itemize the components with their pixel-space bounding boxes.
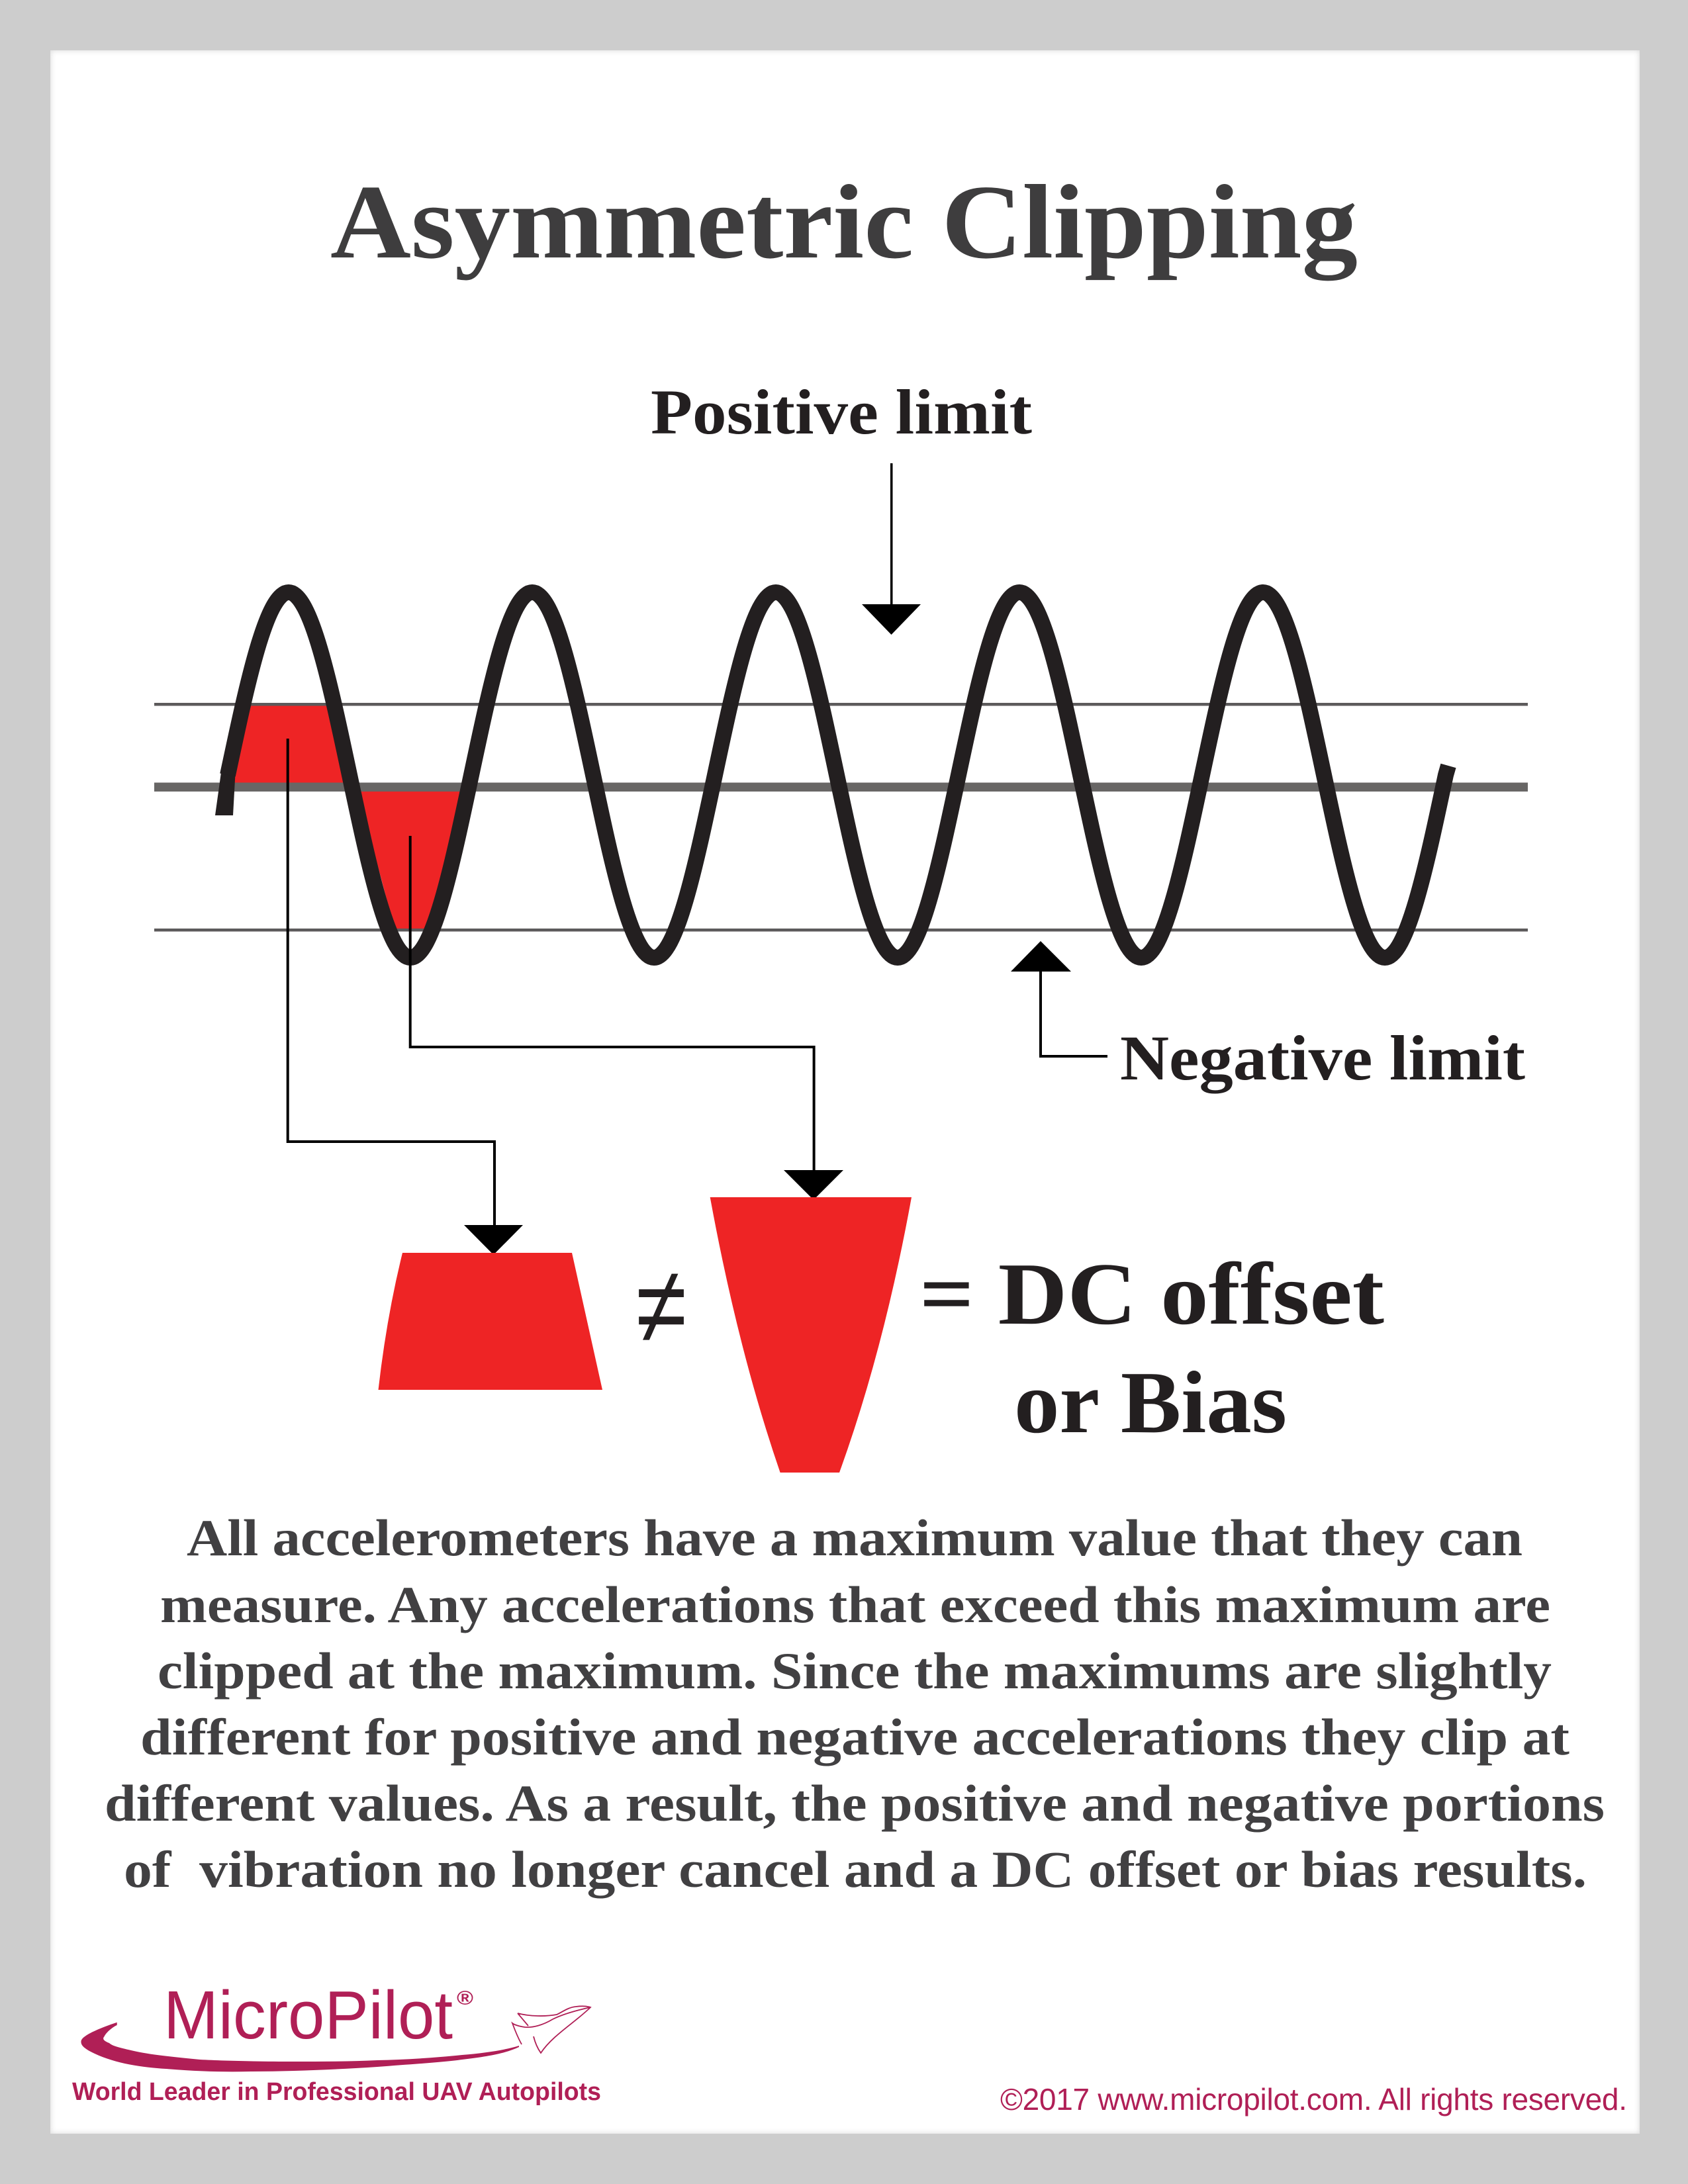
highlighted negative area: [357, 792, 467, 929]
registered mark: ®: [457, 1987, 473, 2009]
logo: MicroPilot: [72, 1977, 601, 2106]
negative limit line: [154, 929, 1528, 932]
highlighted positive area: [232, 703, 348, 783]
negative clipped shape: [710, 1197, 912, 1473]
positive clipped shape: [379, 1253, 602, 1390]
logo wordmark: MicroPilot: [164, 1977, 453, 2053]
label: negative limit: Negative limit: [1120, 1023, 1525, 1093]
equation result: = DC offset: [919, 1245, 1384, 1343]
logo tagline: World Leader in Professional UAV Autopilots: [72, 2078, 601, 2106]
equation result: or Bias: [1014, 1353, 1287, 1451]
logo swoosh: [81, 2023, 519, 2071]
positive limit line: [154, 703, 1528, 705]
explanation text: different for positive and negative accelerations they clip at: [140, 1708, 1570, 1766]
explanation text: clipped at the maximum. Since the maximums are slightly: [158, 1642, 1552, 1700]
explanation text: [105, 1509, 1605, 1898]
vibration sine wave: [215, 592, 1448, 958]
connector: negative area to shape: [410, 836, 843, 1200]
copyright notice: ©2017 www.micropilot.com. All rights reserved.: [1000, 2082, 1627, 2116]
logo plane: [512, 2006, 590, 2053]
not equal sign: ≠: [636, 1245, 686, 1367]
explanation text: different values. As a result, the positive and negative portions: [105, 1774, 1605, 1832]
arrow: negative limit: [1011, 941, 1107, 1056]
equation result: [919, 1245, 1384, 1451]
zero line: [154, 782, 1528, 792]
label: positive limit: Positive limit: [651, 377, 1032, 447]
connector: positive area to shape: [288, 739, 523, 1255]
title: Asymmetric Clipping: [330, 163, 1358, 281]
arrow: positive limit: [862, 463, 921, 635]
explanation text: measure. Any accelerations that exceed this maximum are: [160, 1576, 1550, 1633]
explanation text: of vibration no longer cancel and a DC offset or bias results.: [124, 1841, 1587, 1898]
explanation text: All accelerometers have a maximum value that they can: [187, 1509, 1523, 1567]
